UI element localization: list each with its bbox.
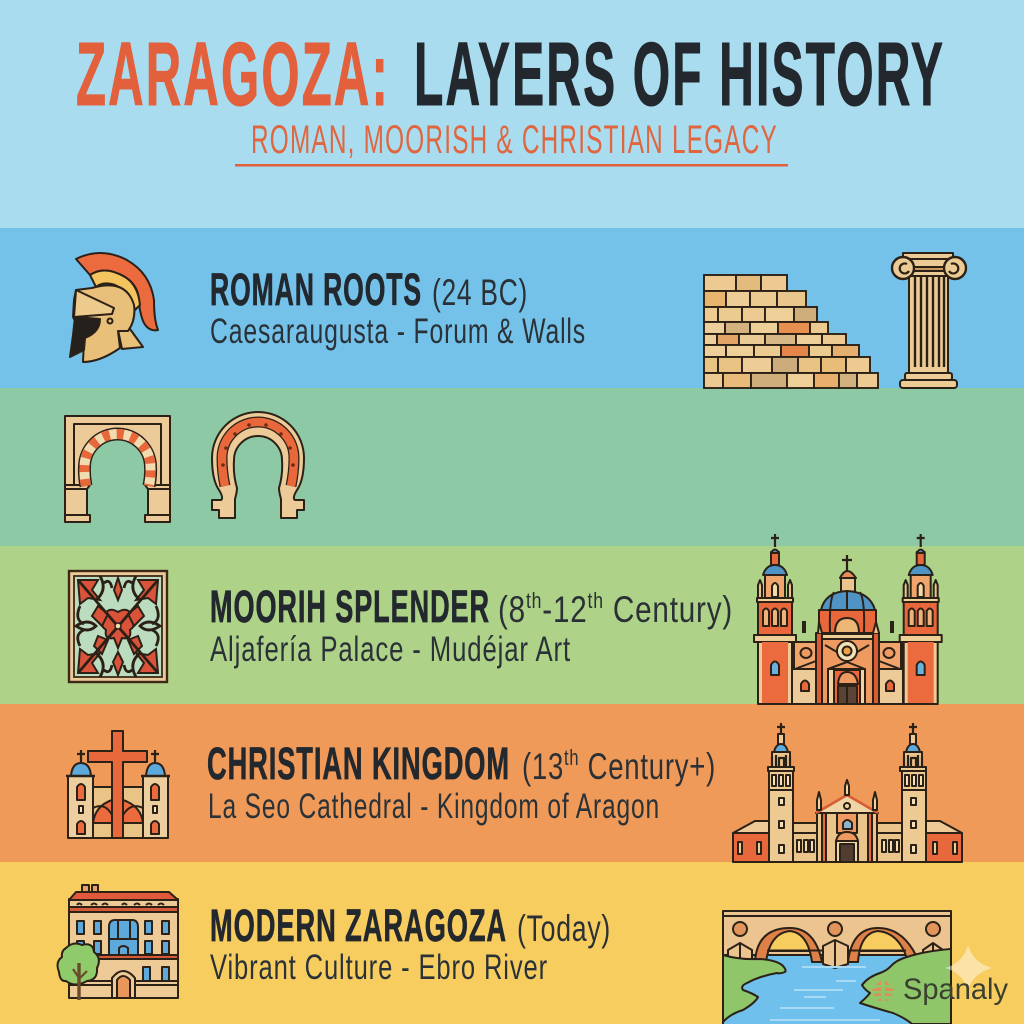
- right tower: [900, 534, 942, 704]
- icon: stone bridge over river: [723, 911, 951, 1024]
- text: moorish splendor: -12: [542, 589, 588, 630]
- text: moorish splendor: MOORIH SPLENDER: [210, 581, 490, 632]
- watermark: brand name: Spanaly: [903, 973, 1008, 1006]
- panel: christian kingdom band: [0, 704, 1024, 862]
- left tower: [754, 534, 796, 704]
- icon: horseshoe arch: [212, 412, 304, 518]
- right tower: [900, 723, 926, 862]
- center block: [816, 780, 878, 862]
- text: moorish splendor: th: [588, 588, 604, 613]
- left tower: [768, 723, 794, 862]
- text: christian kingdom: th: [564, 745, 579, 770]
- panel: moorish splendor band: [0, 546, 1024, 704]
- icon: ionic column: [892, 253, 966, 388]
- text: moorish splendor: [210, 581, 733, 669]
- icon: church with cross: [66, 731, 170, 838]
- panel: moorish arches band: [0, 388, 1024, 546]
- text: christian kingdom: Century+): [579, 746, 716, 787]
- header band: [0, 0, 1024, 228]
- text: modern zaragoza: (Today): [517, 908, 611, 949]
- text: christian kingdom: [207, 738, 716, 826]
- text: christian kingdom: (13: [522, 746, 578, 787]
- icon: mudejar tile: [69, 571, 167, 682]
- icon: roman helmet: [70, 253, 158, 362]
- tree: [58, 944, 99, 1000]
- icon: basilica: [754, 534, 942, 704]
- text: moorish splendor: Century): [604, 589, 733, 630]
- text: roman roots: ROMAN ROOTS: [210, 264, 422, 315]
- watermark: sparkle: [945, 945, 992, 990]
- text: modern zaragoza: MODERN ZARAGOZA: [210, 900, 507, 951]
- left bank: [723, 955, 786, 1024]
- central dome: [819, 555, 876, 634]
- panel: roman band: [0, 228, 1024, 388]
- text: roman roots: [210, 264, 586, 351]
- icon: roman brick wall: [704, 275, 878, 388]
- title: ZARAGOZA:: [76, 25, 390, 125]
- panel: modern band: [0, 862, 1024, 1024]
- text: roman roots: (24 BC): [432, 272, 528, 313]
- right bank: [860, 949, 951, 1024]
- text: moorish splendor: (8: [498, 589, 533, 630]
- text: christian kingdom: CHRISTIAN KINGDOM: [207, 738, 510, 789]
- text: christian kingdom: La Seo Cathedral - Kingdom of Aragon: [208, 787, 660, 826]
- text: moorish splendor: Aljafería Palace - Mudéjar Art: [210, 630, 571, 669]
- icon: modern building: [58, 885, 178, 1000]
- watermark: logo mark: [872, 980, 894, 1001]
- facade: [792, 621, 903, 704]
- text: moorish splendor: th: [526, 588, 542, 613]
- icon: la seo cathedral: [733, 723, 962, 862]
- text: modern zaragoza: Vibrant Culture - Ebro River: [210, 948, 548, 987]
- text: modern zaragoza: [210, 900, 611, 987]
- title: [76, 25, 945, 125]
- icon: moorish arch: [65, 416, 170, 522]
- text: roman roots: Caesaraugusta - Forum & Walls: [210, 312, 586, 351]
